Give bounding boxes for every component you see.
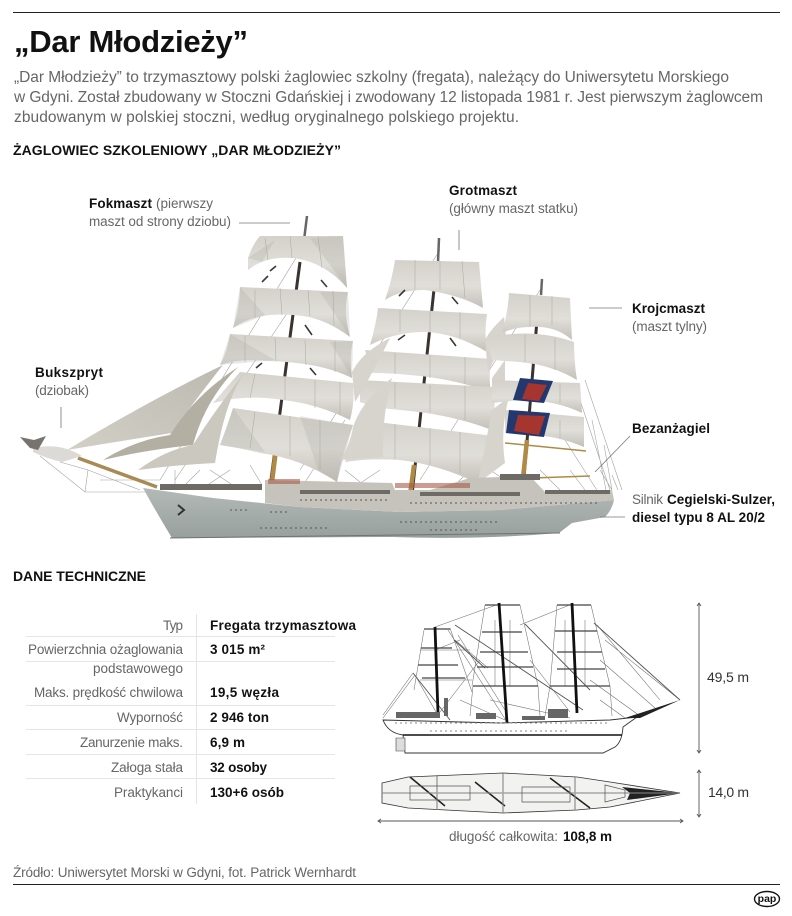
row: displacement bbox=[117, 710, 269, 725]
row: speed: 19,5 węzła bbox=[210, 685, 279, 700]
intro text: zbudowanym w polskiej stoczni, według oryginalnego polskiego projektu. bbox=[14, 109, 519, 126]
label: engine: diesel typu 8 AL 20/2 bbox=[632, 510, 765, 525]
dimension: length bbox=[449, 829, 612, 844]
row: trainees: 130+6 osób bbox=[210, 785, 284, 800]
drawing bowsprit bbox=[625, 700, 680, 718]
side view technical drawing bbox=[383, 603, 680, 753]
masts bbox=[271, 216, 590, 495]
label: Krojcmaszt: (maszt tylny) bbox=[632, 319, 707, 334]
leader lines bbox=[61, 223, 630, 517]
bowsprit bbox=[20, 436, 157, 487]
dimension: length: długość całkowita: bbox=[449, 829, 558, 844]
label: Krojcmaszt bbox=[632, 301, 707, 334]
row: draught bbox=[80, 735, 245, 750]
label: engine: Cegielski-Sulzer, bbox=[667, 492, 775, 507]
section heading: ship: ŻAGLOWIEC SZKOLENIOWY „DAR MŁODZIEŻY” bbox=[13, 142, 341, 158]
row: sail area bbox=[28, 642, 266, 676]
row: crew: 32 osoby bbox=[210, 760, 267, 775]
drawing hull bbox=[383, 717, 637, 753]
jib sails bbox=[67, 365, 245, 470]
intro text: w Gdyni. Został zbudowany w Stoczni Gdańskiej i zwodowany 12 listopada 1981 r. Jest pierwszym żaglowcem bbox=[13, 89, 763, 106]
row: sail area: podstawowego bbox=[93, 661, 183, 676]
row: draught: Zanurzenie maks. bbox=[80, 735, 183, 750]
dimension arrows bbox=[378, 603, 701, 823]
label: Bezanżagiel: Bezanżagiel bbox=[632, 421, 710, 436]
label: Fokmaszt: maszt od strony dziobu) bbox=[89, 214, 231, 229]
row: trainees bbox=[114, 785, 284, 800]
row: sail area: 3 015 m² bbox=[210, 642, 266, 657]
drawing masts bbox=[435, 603, 577, 723]
intro text: „Dar Młodzieży” to trzymasztowy polski żaglowiec szkolny (fregata), należący do Uniwersytetu Morskiego bbox=[14, 69, 729, 86]
flags on the mizzen sails bbox=[506, 378, 553, 437]
label: Fokmaszt: Fokmaszt bbox=[89, 196, 152, 211]
foremast sails bbox=[213, 236, 354, 482]
logo: pap: pap bbox=[758, 893, 776, 905]
row: type: Fregata trzymasztowa bbox=[210, 618, 356, 633]
technical data table bbox=[26, 614, 356, 804]
hull bbox=[143, 474, 614, 538]
drawing stays bbox=[413, 623, 680, 720]
row: trainees: Praktykanci bbox=[114, 785, 183, 800]
dimension: beam: 14,0 m bbox=[708, 784, 749, 800]
label: Fokmaszt bbox=[89, 196, 231, 229]
drawing yards bbox=[418, 605, 610, 686]
row: crew bbox=[111, 760, 267, 775]
label: Bukszpryt bbox=[35, 365, 104, 398]
logo: pap bbox=[754, 892, 780, 906]
foremast sail shadows bbox=[220, 236, 353, 482]
label: Fokmaszt: (pierwszy bbox=[156, 196, 213, 211]
label: Grotmaszt: (główny maszt statku) bbox=[449, 201, 578, 216]
label: engine: Silnik bbox=[632, 492, 663, 507]
dimension: length: 108,8 m bbox=[563, 829, 612, 844]
label: Grotmaszt bbox=[449, 183, 578, 216]
bottom rule bbox=[13, 884, 780, 885]
title: „Dar Młodzieży” bbox=[14, 24, 248, 59]
row: type: Typ bbox=[163, 618, 183, 633]
row: speed: Maks. prędkość chwilowa bbox=[34, 685, 183, 700]
label: Bukszpryt: Bukszpryt bbox=[35, 365, 104, 380]
intro text bbox=[13, 69, 763, 126]
row: draught: 6,9 m bbox=[210, 735, 245, 750]
mainmast sails bbox=[345, 260, 495, 483]
top view technical drawing bbox=[382, 773, 680, 813]
staysails bbox=[340, 317, 509, 483]
row: displacement: 2 946 ton bbox=[210, 710, 269, 725]
section heading: technical data: DANE TECHNICZNE bbox=[13, 568, 146, 584]
row: sail area: Powierzchnia ożaglowania bbox=[28, 642, 183, 657]
row: crew: Załoga stała bbox=[111, 760, 183, 775]
label: Grotmaszt: Grotmaszt bbox=[449, 183, 518, 198]
rigging bbox=[40, 240, 622, 495]
label: engine bbox=[632, 492, 775, 525]
drawing deckhouses bbox=[396, 698, 568, 720]
label: Krojcmaszt: Krojcmaszt bbox=[632, 301, 706, 316]
row: displacement: Wyporność bbox=[117, 710, 183, 725]
mizzen sails bbox=[485, 293, 584, 447]
drawing rigging bbox=[383, 604, 680, 722]
sail seams and stays bbox=[245, 236, 560, 473]
top rule bbox=[13, 12, 780, 13]
row: speed bbox=[34, 685, 279, 700]
source: Źródło: Uniwersytet Morski w Gdyni, fot. Patrick Wernhardt bbox=[13, 865, 356, 880]
ship photo illustration bbox=[20, 216, 622, 538]
label: Bukszpryt: (dziobak) bbox=[35, 383, 89, 398]
dimension: height: 49,5 m bbox=[707, 669, 749, 685]
